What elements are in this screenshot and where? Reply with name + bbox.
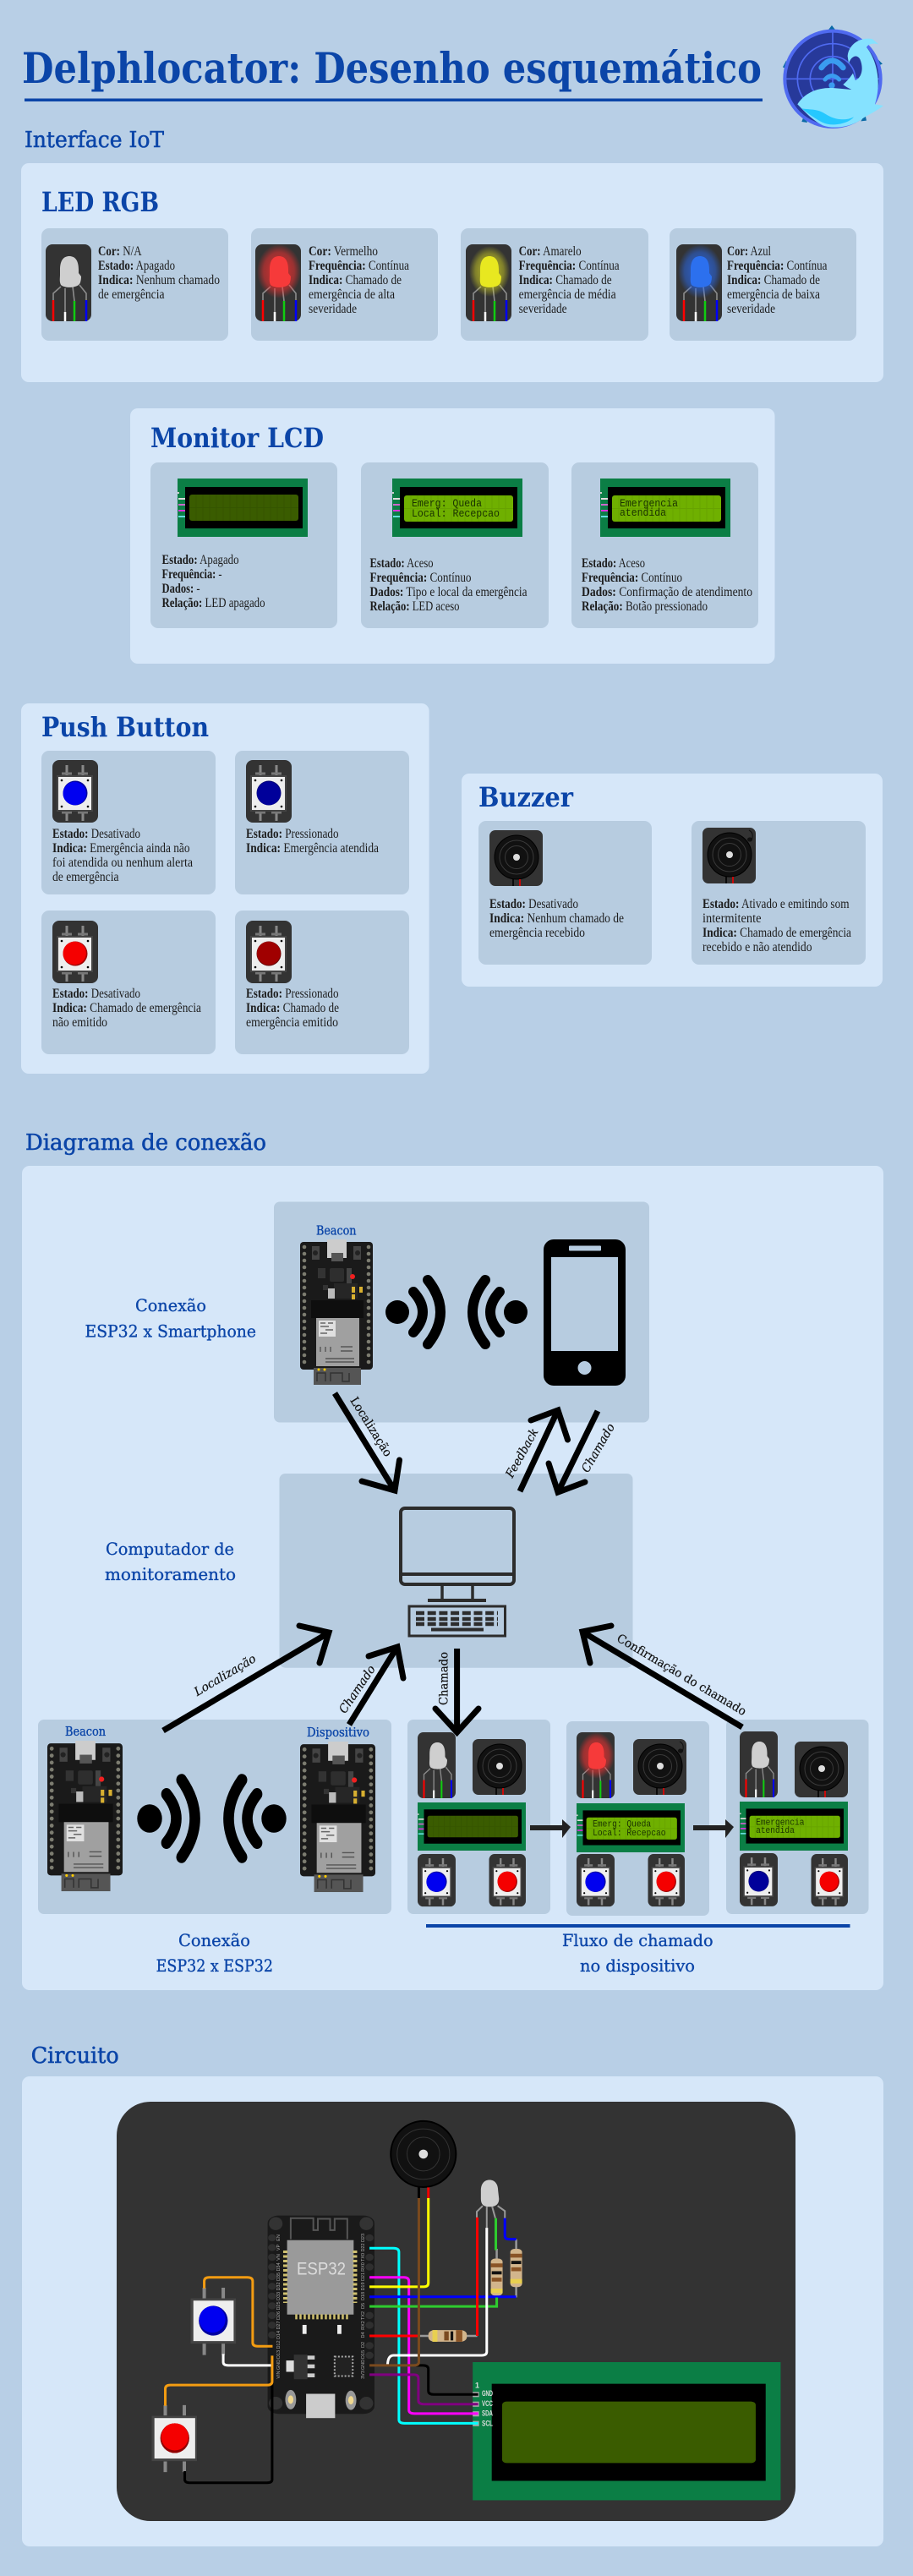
text: LED blue description: Indica: Chamado de [727,273,820,287]
ESP32 pin labels: D34 [276,2262,282,2272]
text: buzzer off description: emergência recebido [489,926,585,940]
label: Fluxo de chamado no dispositivo: Fluxo de chamado [562,1930,713,1950]
icon: LED blue [676,244,722,321]
label: Computador de monitoramento [105,1539,236,1584]
text: LED yellow description: Cor: Amarelo [519,244,582,259]
text: buzzer on description: recebido e não atendido [703,940,812,954]
ESP32 chip label: ESP32 [297,2260,346,2279]
icon: Delphlocator logo [783,25,883,128]
icon: blue button [577,1854,615,1906]
text: LED yellow description: severidade [519,302,567,316]
text: LCD off description: Dados: - [162,582,200,596]
text: buzzer on description [703,897,851,954]
icon: ESP32 device [300,1742,375,1892]
icon: red button pressed [246,921,292,983]
ESP32 pin labels: D2 [361,2342,366,2348]
card: LCD atendida [571,462,758,628]
ESP32 pin labels: D33 [276,2292,282,2300]
text: LED red description: severidade [309,302,357,316]
ESP32 pin labels: D26 [276,2311,282,2320]
ESP32 pin labels: TX2 [361,2311,366,2320]
text: red button released description: não emitido [52,1015,107,1030]
ESP32 pin labels: D35 [276,2272,282,2281]
text: red button pressed description: Indica: Chamado de [246,1001,339,1015]
icon: LCD emergency: Local: Recepcao [593,1829,666,1839]
icon: ESP32 beacon board [300,1239,373,1385]
icon: buzzer off [489,830,543,886]
text: LED yellow description: Frequência: Contínua [519,259,620,273]
panel: Monitor LCD [130,408,774,664]
flow underline [426,1924,850,1928]
text: LCD confirmation description: Estado: Aceso [582,556,645,571]
text: LCD off description: Estado: Apagado [162,553,238,567]
text: LCD confirmation description: Relação: Botão pressionado [582,599,708,614]
ESP32 pin labels: RX2 [361,2321,366,2330]
arrow: flow step 2 to 3 [693,1819,734,1838]
arrow: Localização ESP32 to computer [163,1626,329,1731]
panel: ESP32 x Smartphone [274,1202,649,1422]
ESP32 board [268,2216,374,2418]
ESP32 pin labels: D4 [361,2332,366,2338]
icon: computer [401,1508,514,1636]
text: LCD off description: Frequência: - [162,567,221,582]
icon: LED yellow [466,244,511,321]
text: red button pressed description [246,987,339,1030]
arrow: Confirmação do chamado [582,1626,748,1727]
panel: monitoring computer [279,1474,632,1668]
text: red button pressed description: emergência emitido [246,1015,338,1030]
RGB LED [477,2180,505,2228]
LCD pin labels [475,2382,493,2427]
label: Conexão ESP32 x Smartphone [85,1295,256,1341]
icon: LCD confirmation [740,1802,848,1851]
text: buzzer on description: intermitente [703,911,761,926]
text: blue button released description: Indica: Emergência ainda não [52,841,189,856]
text: LED blue description: Cor: Azul [727,244,771,259]
icon: LCD with emergency data: Local: Recepcao [412,507,500,520]
label: Conexão ESP32 x ESP32 [156,1930,273,1976]
heading: Buzzer: Buzzer [478,781,574,813]
text: LCD on description: Relação: LED aceso [370,599,460,614]
icon: LCD emergency: Emerg: Queda [593,1820,652,1830]
text: LED red description: emergência de alta [309,287,395,302]
arrow: Chamado device to computer: Chamado [336,1663,379,1716]
icon: LED off [740,1731,778,1797]
card: buzzer on [692,821,866,965]
text: blue button pressed description: Indica: Emergência atendida [246,841,379,856]
resistors [420,2240,522,2342]
text: blue button released description: foi atendida ou nenhum alerta [52,856,193,870]
ESP32 pin labels: EN [276,2234,282,2241]
card: red button pressed [235,911,409,1054]
text: LCD confirmation description [582,556,752,614]
text: LED yellow description: Indica: Chamado de [519,273,612,287]
ESP32 pin labels: D27 [276,2321,282,2330]
icon: LED red [255,244,301,321]
text: blue button pressed description [246,827,379,856]
panel: flow step 3 [726,1720,869,1914]
ESP32 pin labels: D23 [361,2234,366,2242]
arrow: flow step 1 to 2 [530,1819,571,1838]
LCD pin labels: 1 [475,2382,479,2390]
title underline [25,98,763,101]
text: LED off description [98,244,220,302]
ESP32 pin labels: GND [276,2360,282,2370]
icon: LCD confirmation: Emergencia [756,1819,805,1829]
text: LED off description: de emergência [98,287,164,302]
text: buzzer on description: Estado: Ativado e emitindo som [703,897,850,911]
icon: blue button [418,1854,456,1906]
ESP32 pin labels [276,2234,366,2379]
label: Computador de monitoramento: Computador de [106,1539,234,1559]
panel: circuit [22,2076,883,2546]
heading: LED RGB: LED RGB [41,186,159,218]
heading: Diagrama de conexão: Diagrama de conexão [25,1130,266,1156]
heading: Push Button: Push Button [41,711,209,743]
LCD pin labels: SDA [482,2409,493,2418]
icon: LCD with emergency data [392,479,522,537]
text: LCD on description: Estado: Aceso [370,556,433,571]
label: Conexão ESP32 x Smartphone: Conexão [135,1295,206,1315]
text: LED blue description [727,244,827,316]
ESP32 pin labels: 3V3 [361,2371,366,2379]
icon: ESP32 beacon [47,1741,123,1891]
text: LCD confirmation description: Dados: Confirmação de atendimento [582,585,752,599]
text: LED red description [309,244,409,316]
wires [166,2198,517,2483]
text: red button pressed description: Estado: Pressionado [246,987,338,1001]
icon: red button [812,1854,848,1906]
text: LED off description: Indica: Nenhum chamado [98,273,220,287]
panel: flow step 1 [407,1720,550,1914]
icon: LED off [418,1732,456,1798]
arrow: Localização beacon to computer: Localização [347,1395,394,1459]
label: Dispositivo: Dispositivo [307,1725,369,1740]
arrow: Chamado computer to device: Chamado [438,1652,451,1705]
card: blue button pressed [235,751,409,894]
icon: buzzer on [633,1739,686,1795]
icon: LCD off [178,479,308,537]
icon: buzzer off [795,1742,848,1797]
icon: LCD confirmation [600,479,730,537]
buzzer [391,2121,456,2198]
LCD display [473,2362,780,2500]
text: LCD confirmation description: Frequência: Contínuo [582,571,682,585]
card: blue button released [41,751,216,894]
text: blue button released description [52,827,193,884]
panel: Buzzer [462,774,883,987]
card: LED amarelo [461,228,648,341]
icon: LED red [577,1732,615,1798]
text: LED red description: Frequência: Contínua [309,259,409,273]
ESP32 pin labels: VP [276,2245,282,2251]
arrow: Feedback: Feedback [503,1426,542,1481]
text: buzzer off description [489,897,624,940]
ESP32 pin labels: GND [361,2360,366,2370]
LCD pin labels: GND [482,2389,493,2398]
icon: red button [489,1854,526,1906]
label: Conexão ESP32 x ESP32: Conexão [178,1930,250,1950]
label: Conexão ESP32 x Smartphone: ESP32 x Smartphone [85,1321,256,1341]
text: LED red description: Cor: Vermelho [309,244,378,259]
ESP32 pin labels: D18 [361,2292,366,2300]
heading: Interface IoT: Interface IoT [25,128,165,153]
icon: red button [648,1854,685,1906]
icon: LCD confirmation: atendida [756,1826,795,1836]
arrow: Chamado device to computer [336,1647,403,1725]
text: LED off description: Cor: N/A [98,244,142,259]
card: red button released [41,911,216,1054]
arrow: Localização beacon to computer [335,1393,399,1490]
ESP32 pin labels: D25 [276,2301,282,2311]
card: buzzer off [478,821,652,965]
text: LED yellow description [519,244,620,316]
heading: Circuito: Circuito [31,2043,119,2069]
card: LED vermelho [251,228,438,341]
ESP32 pin labels: D32 [276,2282,282,2291]
text: red button released description [52,987,201,1030]
text: LCD on description: Frequência: Contínuo [370,571,472,585]
blue push button [191,2288,236,2355]
text: blue button released description: de emergência [52,870,118,884]
text: LED blue description: emergência de baixa [727,287,820,302]
icon: LCD emergency [577,1803,685,1852]
label: Conexão ESP32 x ESP32: ESP32 x ESP32 [156,1955,273,1976]
ESP32 pin labels: D15 [361,2350,366,2359]
LCD pin labels: VCC [482,2399,493,2408]
text: LED blue description: Frequência: Contínua [727,259,827,273]
red push button [151,2405,197,2472]
arrow: Feedback [503,1410,568,1491]
ESP32 pin labels: TX0 [361,2253,366,2262]
text: red button released description: Estado: Desativado [52,987,140,1001]
ESP32 pin labels: VIN [276,2371,282,2379]
arrow: Chamado smartphone to computer: Chamado [579,1421,618,1475]
icon: wireless signal [385,1280,528,1344]
text: buzzer on description: Indica: Chamado de emergência [703,926,851,940]
icon: LCD off [418,1802,526,1851]
icon: blue button [52,760,98,823]
icon: LED off [46,244,91,321]
panel: ESP32 x ESP32 [38,1720,391,1914]
label: Fluxo de chamado no dispositivo [562,1930,713,1976]
circuit diagram background [117,2102,795,2521]
label: Beacon: Beacon [316,1222,357,1238]
icon: wireless signal [137,1780,287,1857]
card: LED apagado [41,228,228,341]
icon: buzzer off [473,1739,526,1795]
text: LCD off description [162,553,265,610]
arrow: Localização ESP32 to computer: Localização [191,1652,259,1699]
ESP32 pin labels: D13 [276,2350,282,2359]
text: red button released description: Indica: Chamado de emergência [52,1001,201,1015]
card: LCD aceso [361,462,549,628]
heading: Monitor LCD: Monitor LCD [150,422,324,454]
arrow: Confirmação do chamado: Confirmação do chamado [615,1632,748,1719]
ESP32 pin labels: D12 [276,2340,282,2349]
card: LCD apagado [150,462,337,628]
text: LED blue description: severidade [727,302,775,316]
text: LCD on description: Dados: Tipo e local da emergência [370,585,528,599]
card: LED azul [670,228,856,341]
text: buzzer off description: Estado: Desativado [489,897,578,911]
icon: LCD confirmation: atendida [620,506,666,519]
text: blue button pressed description: Estado: Pressionado [246,827,338,841]
arrow: Chamado computer to device [435,1649,478,1732]
icon: blue button pressed [246,760,292,823]
label: Beacon: Beacon [65,1724,106,1739]
panel: Push Button [21,703,429,1074]
icon: buzzer on [703,828,756,883]
circuit drawing in reference-crop coordinates [151,2121,780,2500]
LCD pin labels: SCL [482,2419,493,2427]
ESP32 pin labels: D21 [361,2272,366,2281]
icon: smartphone [544,1239,626,1386]
label: Fluxo de chamado no dispositivo: no dispositivo [580,1955,695,1976]
text: blue button released description: Estado: Desativado [52,827,140,841]
panel: LED RGB [21,163,883,382]
icon: LCD with emergency data: Emerg: Queda [412,497,482,510]
ESP32 pin labels: D19 [361,2282,366,2291]
ESP32 pin labels: D5 [361,2303,366,2309]
text: buzzer off description: Indica: Nenhum chamado de [489,911,624,926]
text: LED red description: Indica: Chamado de [309,273,402,287]
ESP32 pin labels: D22 [361,2243,366,2252]
icon: red button [52,921,98,983]
panel: flow step 2 [566,1721,709,1916]
ESP32 pin labels: RX0 [361,2262,366,2272]
text: LED yellow description: emergência de média [519,287,616,302]
text: LCD off description: Relação: LED apagado [162,596,265,610]
ESP32 pin labels: D14 [276,2331,282,2339]
label: Computador de monitoramento: monitoramento [105,1564,236,1584]
panel: connection diagram [22,1166,883,1990]
icon: blue button pressed [740,1853,778,1906]
icon: LCD confirmation: Emergencia [620,497,678,510]
arrow: Chamado smartphone to computer [549,1411,618,1492]
text: LCD on description [370,556,528,614]
text: LED off description: Estado: Apagado [98,259,175,273]
ESP32 pin labels: VN [276,2254,282,2261]
title: Delphlocator: Desenho esquemático [22,43,762,93]
